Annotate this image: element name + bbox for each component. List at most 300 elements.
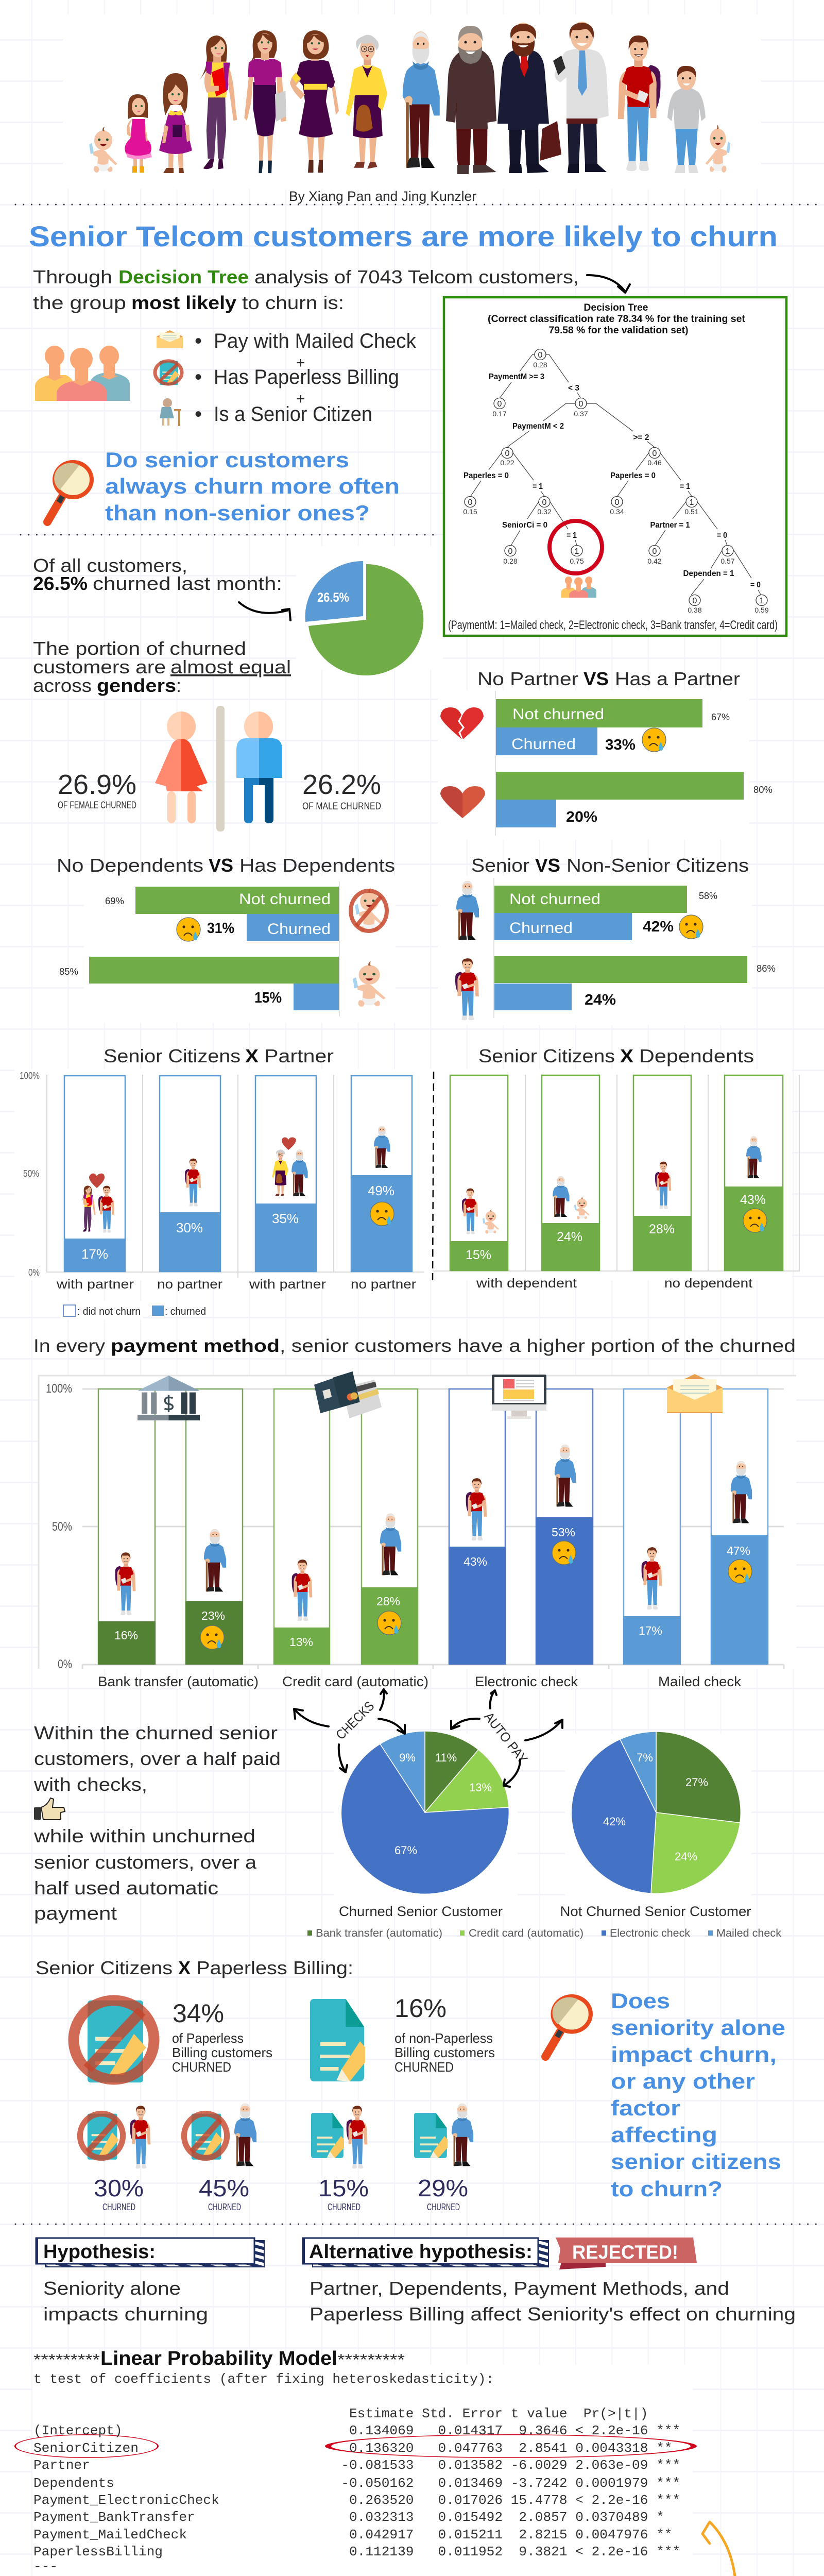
hypothesis block: Seniority alone <box>43 2278 181 2299</box>
panel: decision tree: 0 <box>693 597 697 605</box>
stat: non-paperless churn <box>310 1994 495 2081</box>
regression table: linear probability model: Payment_BankTransfer <box>33 2510 195 2525</box>
icon: sad emoji <box>679 915 703 939</box>
chart: seniors x dependents stacked bars: 24% <box>557 1230 582 1244</box>
panel: decision tree: 0 <box>538 351 543 360</box>
heading: seniors x paperless billing: Paperless Billing: <box>196 1957 353 1978</box>
icon: sad emoji <box>642 728 666 752</box>
stat: senior non-paperless 29%: CHURNED <box>427 2202 460 2212</box>
pie legend: Credit card (automatic) <box>469 1927 583 1939</box>
question: seniority alone: affecting <box>611 2123 717 2147</box>
icon: young man <box>455 958 479 1020</box>
divider <box>216 706 225 832</box>
stat: female churn: OF FEMALE CHURNED <box>58 800 136 811</box>
baby on the right <box>706 125 730 173</box>
question: seniority alone: impact churn, <box>611 2042 777 2066</box>
stat: senior paperless 45%: 45% <box>199 2175 249 2201</box>
chart: senior vs non senior: 86% <box>757 963 776 974</box>
most likely group list: + <box>296 354 305 371</box>
icon: female figure <box>155 711 208 823</box>
panel: decision tree: 0 <box>653 547 657 556</box>
panel: decision tree: 0 <box>508 547 513 556</box>
chart: payment method stacked bars: 23% <box>201 1609 225 1622</box>
panel: decision tree <box>444 297 786 636</box>
stat: male churn: 26.2% <box>302 769 381 800</box>
heading: Has Dependents <box>239 855 395 876</box>
icon: baby <box>353 961 386 1007</box>
chart: dependents: 69% <box>105 896 124 906</box>
panel: decision tree: PaymentM < 2 <box>512 422 564 431</box>
chart: seniors x partner stacked bars: 0% <box>28 1267 40 1278</box>
item: paperless billing: • <box>195 366 202 388</box>
icon: pointing hand <box>34 1798 65 1820</box>
heading <box>477 668 740 689</box>
stat: paperless churn: 34% <box>173 1999 224 2028</box>
pie legend: Mailed check <box>716 1927 782 1939</box>
sad emojis <box>200 1541 752 1649</box>
category labels <box>98 1674 742 1689</box>
icon: broken heart <box>440 707 484 739</box>
panel: decision tree: 0.28 <box>503 557 518 565</box>
stat: young paperless 30%: 30% <box>94 2175 144 2201</box>
hand-drawn arrows <box>294 1689 562 1787</box>
chart: payment method stacked bars: 100% <box>46 1382 72 1396</box>
regression table: linear probability model: 0.032313 0.015492 2.0857 0.0370489 * <box>341 2510 664 2525</box>
regression table: linear probability model: (Intercept) <box>33 2423 123 2438</box>
figures: customers in bars <box>115 1445 752 1621</box>
chart: dependents: 85% <box>59 967 78 977</box>
panel: decision tree: Partner = 1 <box>650 521 690 530</box>
item: mailed check: • <box>195 330 202 352</box>
hypothesis block: impacts churning <box>43 2303 208 2325</box>
heading: seniors x paperless billing: X <box>178 1957 191 1978</box>
panel: decision tree: 0.32 <box>537 507 552 516</box>
panel: decision tree: < 3 <box>568 384 579 393</box>
question: seniority alone: Does <box>611 1989 670 2013</box>
axis labels <box>56 1277 416 1292</box>
category labels: Credit card (automatic) <box>282 1674 428 1689</box>
chart: seniors x dependents stacked bars: with dependent <box>476 1276 577 1291</box>
chart: no partner vs partner: 33% <box>605 737 636 753</box>
legend: : churned <box>165 1306 206 1317</box>
heading: Non-Senior Citizens <box>566 855 749 876</box>
panel: decision tree: Dependen = 1 <box>683 569 734 578</box>
panel: decision tree: = 1 <box>680 482 690 491</box>
pie chart: not churned senior customer: 24% <box>675 1850 697 1863</box>
heading: seniors x paperless billing: Senior Citizens <box>36 1957 173 1978</box>
pie chart: not churned senior customer: Not Churned Senior Customer <box>560 1904 751 1919</box>
regression table: linear probability model: PaperlessBilling <box>33 2544 163 2560</box>
panel: decision tree: 1 <box>760 597 764 605</box>
icon: young man <box>655 1162 671 1209</box>
regression table: linear probability model: Estimate Std. Error t value Pr(>|t|) <box>341 2406 648 2421</box>
icon: paperless document <box>155 361 182 385</box>
text: payment insight: with checks, <box>33 1774 147 1795</box>
hypothesis block: Hypothesis: <box>43 2241 156 2263</box>
stat: paperless churn: Billing customers <box>172 2045 272 2060</box>
hand-drawn annotation: checks: CHECKS <box>333 1698 377 1742</box>
panel: decision tree: 1 <box>690 498 694 507</box>
text: payment insight: while within unchurned <box>33 1825 255 1846</box>
regression table: linear probability model <box>14 2371 697 2576</box>
heading: Senior <box>471 855 529 876</box>
category labels: Mailed check <box>658 1674 742 1689</box>
icon: small group of people <box>561 577 596 598</box>
stat: non-paperless churn: Billing customers <box>394 2045 495 2060</box>
most likely group list: Is a Senior Citizen <box>214 403 372 426</box>
stat: non-paperless churn: 16% <box>394 1994 447 2023</box>
regression table: linear probability model: Payment_ElectronicCheck <box>33 2493 219 2508</box>
red highlight circle <box>550 521 602 573</box>
chart: dependents <box>57 855 395 1016</box>
panel: decision tree: 0.37 <box>574 410 588 418</box>
woman in purple dress <box>290 30 339 173</box>
chart: payment method stacked bars: 28% <box>376 1595 400 1608</box>
regression table: linear probability model: --- <box>33 2559 58 2574</box>
heading <box>471 855 749 876</box>
heading: linear probability model: ********* <box>33 2351 100 2368</box>
text: gender: customers are <box>33 656 166 677</box>
regression table: linear probability model: -0.081533 0.013582 -6.0029 2.063e-09 *** <box>341 2458 680 2473</box>
title: Senior Telcom customers are more likely to churn <box>29 220 778 252</box>
icon: magnifying glass <box>545 1996 591 2057</box>
chart: seniors x partner stacked bars: 17% <box>81 1246 108 1262</box>
boy in grey hoodie <box>667 66 706 173</box>
panel: decision tree: Paperles = 0 <box>610 471 656 480</box>
man in dark suit with briefcase <box>497 23 561 173</box>
text: gender: almost equal <box>170 656 291 677</box>
chart: seniors x dependents stacked bars: 28% <box>649 1222 675 1236</box>
panel: decision tree: 0.42 <box>647 557 662 565</box>
chart: seniors x dependents stacked bars: no dependent <box>664 1276 752 1291</box>
chart: seniors x partner stacked bars <box>20 1071 424 1317</box>
heading: seniors x dependents: Dependents <box>639 1045 754 1066</box>
panel: decision tree: 0.38 <box>688 606 702 614</box>
chart: no partner vs partner: 80% <box>753 785 772 795</box>
grandfather with cane <box>403 31 440 168</box>
chart: payment method stacked bars: 43% <box>464 1555 487 1568</box>
stat: senior non-paperless 29%: 29% <box>418 2175 468 2201</box>
text: gender: The portion of churned <box>33 638 246 659</box>
text: gender: : <box>176 675 181 696</box>
text: share churned: 26.5% <box>33 573 88 594</box>
icon: magnifying glass <box>47 462 92 522</box>
rejected ribbon <box>556 2238 697 2269</box>
question: do seniors always churn more: Do senior customers <box>105 448 349 472</box>
text: gender <box>33 638 291 696</box>
axis labels: no partner <box>351 1277 416 1292</box>
axis labels: no partner <box>157 1277 222 1292</box>
pie chart: churned senior customer: 11% <box>435 1751 457 1764</box>
panel: decision tree: SeniorCi = 0 <box>502 521 547 530</box>
text: share churned: Of all customers, <box>33 555 187 576</box>
question: seniority alone: senior citizens <box>611 2149 781 2174</box>
chart: payment method stacked bars: 17% <box>639 1624 662 1637</box>
panel: decision tree: 0.17 <box>492 410 507 418</box>
regression table: linear probability model: 0.136320 0.047763 2.8541 0.0043318 ** <box>341 2441 672 2456</box>
chart: payment method stacked bars: 50% <box>52 1520 72 1534</box>
chart: seniors x dependents stacked bars <box>433 1075 800 1291</box>
item: senior citizen: • <box>195 403 202 426</box>
text: gender: across <box>33 675 92 696</box>
regression table: linear probability model: SeniorCitizen <box>33 2441 139 2456</box>
alternative hypothesis block: Paperless Billing affect Seniority's effect on churning <box>310 2303 796 2325</box>
question: do seniors always churn more: than non-senior ones? <box>105 501 370 525</box>
question: seniority alone: to churn? <box>611 2177 723 2201</box>
pie chart: not churned senior customer: 7% <box>637 1751 653 1764</box>
heading: payment methods <box>33 1336 796 1356</box>
baby with bottle <box>89 127 117 173</box>
heading: seniors x paperless billing <box>36 1957 353 1978</box>
stat: paperless churn: CHURNED <box>172 2059 231 2075</box>
stat: young non-paperless 15%: 15% <box>318 2175 369 2201</box>
grandmother <box>346 35 387 169</box>
panel: decision tree: 1 <box>726 547 730 556</box>
most likely group list: Has Paperless Billing <box>214 366 399 388</box>
intro text: most likely <box>131 292 236 313</box>
heading: payment methods: In every <box>33 1336 106 1356</box>
heading: seniors x dependents: Senior Citizens <box>478 1045 615 1066</box>
pie legend: Bank transfer (automatic) <box>316 1927 442 1939</box>
regression table: linear probability model: Partner <box>33 2458 90 2473</box>
chart: dependents: 15% <box>254 990 282 1006</box>
panel: decision tree: 0.46 <box>647 459 662 467</box>
stat: young paperless 30% <box>80 2106 150 2212</box>
heading: No Dependents <box>57 855 203 876</box>
icon: senior couple <box>272 1138 308 1196</box>
heading: linear probability model <box>33 2348 405 2369</box>
chart: seniors x dependents stacked bars: 15% <box>466 1248 491 1262</box>
heading: Has a Partner <box>615 668 740 689</box>
stat: senior paperless 45% <box>184 2104 256 2212</box>
authors line: By Xiang Pan and Jing Kunzler <box>289 189 476 204</box>
highlight ellipses <box>14 2434 697 2458</box>
woman in magenta top <box>244 30 286 173</box>
most likely group list <box>155 330 417 426</box>
chart: senior vs non senior: Not churned <box>509 891 600 908</box>
heading: seniors x partner: Senior Citizens <box>104 1045 241 1066</box>
pie chart: churned senior customer: Churned Senior Customer <box>339 1904 503 1919</box>
icon: envelope <box>157 330 183 348</box>
panel: decision tree: 0.15 <box>463 507 477 516</box>
stat: non-paperless churn: of non-Paperless <box>394 2030 493 2046</box>
heading: seniors x partner <box>104 1045 334 1066</box>
panel: decision tree: = 1 <box>533 482 543 491</box>
pie legend: Electronic check <box>610 1927 690 1939</box>
icon: senior man <box>374 1126 390 1168</box>
panel: decision tree: 1 <box>575 547 579 556</box>
stat: young non-paperless 15% <box>311 2106 369 2212</box>
chart: payment method stacked bars: 13% <box>289 1635 313 1649</box>
intro text: Through <box>33 266 112 287</box>
panel: decision tree: 0 <box>468 498 473 507</box>
chart: payment method stacked bars <box>39 1371 796 1689</box>
icon: bank <box>138 1376 200 1420</box>
teenage woman <box>199 36 237 170</box>
chart: no partner vs partner <box>440 668 772 836</box>
icon: male figure <box>236 711 282 823</box>
panel: decision tree: (Correct classification rate 78.34 % for the training set <box>488 314 746 325</box>
alternative hypothesis block: Alternative hypothesis: <box>309 2241 533 2263</box>
axis labels: with partner <box>56 1277 134 1292</box>
category labels: Bank transfer (automatic) <box>98 1674 259 1689</box>
chart: payment method stacked bars: 16% <box>114 1629 138 1642</box>
heading: seniors x partner: Partner <box>264 1045 334 1066</box>
pie chart: not churned senior customer: 27% <box>685 1776 708 1789</box>
text: payment insight: payment <box>34 1903 117 1924</box>
chart: seniors x partner stacked bars: 100% <box>20 1071 40 1081</box>
text: share churned: churned last month: <box>93 573 282 594</box>
man in white shirt and blue tie <box>553 22 609 173</box>
icon: group of people <box>35 346 130 401</box>
chart: payment method stacked bars: 0% <box>58 1657 72 1671</box>
pie chart: not churned senior customer: 42% <box>603 1815 626 1828</box>
heading: VS <box>535 855 560 876</box>
panel: decision tree: 0.28 <box>533 361 547 369</box>
header illustration: family of all ages <box>89 22 730 174</box>
axis labels: with partner <box>249 1277 326 1292</box>
icon: envelope <box>667 1374 723 1413</box>
stat: young paperless 30%: CHURNED <box>102 2202 135 2212</box>
chart: no partner vs partner: Churned <box>511 736 576 753</box>
icon: senior man <box>456 881 479 940</box>
girl in purple dress <box>159 73 192 173</box>
icon: young man with baby <box>462 1189 499 1234</box>
chart: senior vs non senior: 42% <box>643 919 674 935</box>
heading: VS <box>209 855 233 876</box>
text: payment insight <box>33 1722 281 1924</box>
panel: decision tree: 0 <box>497 400 502 409</box>
chart: no partner vs partner: 20% <box>566 809 597 825</box>
chart: dependents: 31% <box>207 920 234 937</box>
regression table: linear probability model: 0.042917 0.015211 2.8215 0.0047976 ** <box>341 2527 672 2543</box>
icon: sad emoji <box>743 1209 767 1232</box>
orange arrow up <box>702 2522 736 2576</box>
most likely group list: Pay with Mailed Check <box>214 330 417 352</box>
panel: decision tree: 0.75 <box>570 557 584 565</box>
pie chart: churned senior customer: 9% <box>399 1751 416 1764</box>
small girl in pink dress <box>125 94 152 173</box>
icon: credit card <box>314 1371 382 1418</box>
young man with backpack <box>618 36 661 171</box>
intro text: analysis of 7043 Telcom customers, <box>254 266 579 287</box>
heading: seniors x dependents <box>478 1045 754 1066</box>
panel: decision tree: 0.22 <box>500 459 514 467</box>
text: payment insight: half used automatic <box>34 1877 218 1899</box>
arrow to decision tree <box>587 275 630 293</box>
hypothesis block <box>36 2238 264 2325</box>
chart: seniors x partner stacked bars: 30% <box>176 1220 203 1235</box>
stat: female churn: 26.9% <box>58 769 136 800</box>
icon: sad emoji <box>370 1202 394 1226</box>
panel: decision tree: 0.59 <box>754 606 769 614</box>
chart: no partner vs partner: Not churned <box>512 706 604 723</box>
intro text: to churn is: <box>242 292 344 313</box>
question: do seniors always churn more <box>105 448 400 525</box>
heading: payment methods: payment method <box>111 1336 280 1356</box>
regression table: linear probability model: 0.263520 0.017026 15.4778 < 2.2e-16 *** <box>341 2493 680 2508</box>
pie chart: churned senior customer <box>339 1731 509 1919</box>
pie chart: overall churn <box>305 561 423 675</box>
panel: decision tree: 0 <box>542 498 547 507</box>
icon: senior man <box>746 1136 762 1178</box>
question: seniority alone: or any other <box>611 2069 755 2093</box>
stat: senior paperless 45%: CHURNED <box>208 2202 241 2212</box>
stat: young non-paperless 15%: CHURNED <box>328 2202 360 2212</box>
panel: decision tree: 0 <box>505 449 510 458</box>
chart: seniors x partner stacked bars: 35% <box>272 1211 299 1226</box>
heading: VS <box>583 668 609 689</box>
chart: seniors x dependents stacked bars: 43% <box>740 1193 766 1207</box>
panel: decision tree: >= 2 <box>633 433 649 442</box>
stat: non-paperless churn: CHURNED <box>394 2059 454 2075</box>
heading: seniors x dependents: X <box>620 1045 633 1066</box>
chart: dependents: Churned <box>267 921 331 938</box>
panel: decision tree: 0.57 <box>720 557 735 565</box>
category labels: Electronic check <box>475 1674 578 1689</box>
heading: payment methods: , senior customers have a higher portion of the churned <box>280 1336 796 1356</box>
hand-drawn annotation: auto pay: AUTO PAY <box>481 1709 531 1767</box>
icon: heart <box>440 786 485 818</box>
pie legend <box>307 1927 782 1939</box>
arrow to pie <box>239 602 290 620</box>
question: seniority alone: seniority alone <box>611 2015 785 2040</box>
panel: decision tree: 0.34 <box>610 507 624 516</box>
regression table: linear probability model: -0.050162 0.013469 -3.7242 0.0001979 *** <box>341 2476 680 2491</box>
heading: seniors x partner: X <box>245 1045 259 1066</box>
icon: senior woman <box>160 398 181 426</box>
icon: senior man with baby <box>553 1176 590 1219</box>
icon: crossed-out baby <box>351 888 387 933</box>
stat: male churn: OF MALE CHURNED <box>302 801 381 812</box>
chart: payment method stacked bars: 53% <box>552 1526 575 1539</box>
pie chart: churned senior customer: 67% <box>394 1844 417 1857</box>
stat: paperless churn: of Paperless <box>172 2030 244 2046</box>
panel: decision tree: 0 <box>653 449 657 458</box>
text: payment insight: senior customers, over a <box>34 1852 257 1873</box>
heading: linear probability model: ********* <box>337 2351 405 2368</box>
text: payment insight: Within the churned senior <box>34 1722 278 1743</box>
panel: decision tree: Decision Tree <box>584 302 648 313</box>
question: do seniors always churn more: always churn more often <box>105 474 400 498</box>
question: seniority alone: factor <box>611 2096 680 2120</box>
heading: No Partner <box>477 668 578 689</box>
intro text: the group <box>33 292 126 313</box>
man in brown sweater <box>446 26 496 174</box>
chart: no partner vs partner: 67% <box>711 712 730 722</box>
heading: linear probability model: Linear Probability Model <box>100 2348 337 2369</box>
pie chart: overall churn: 26.5% <box>317 590 349 605</box>
legend: : did not churn <box>77 1306 141 1317</box>
icon: young man <box>185 1159 201 1207</box>
panel: decision tree: PaymentM >= 3 <box>489 372 544 381</box>
rejected ribbon: REJECTED! <box>572 2242 678 2263</box>
text: payment insight: customers, over a half paid <box>34 1748 281 1769</box>
icon: sad emoji <box>177 918 200 941</box>
text: gender: genders <box>97 675 176 696</box>
panel: decision tree: 0 <box>615 498 620 507</box>
panel: decision tree: 79.58 % for the validation set) <box>549 325 688 336</box>
question: seniority alone <box>611 1989 785 2201</box>
pie chart: churned senior customer: 13% <box>469 1781 492 1794</box>
icon: young couple <box>81 1174 114 1233</box>
chart: senior vs non senior <box>455 855 776 1020</box>
chart: seniors x partner stacked bars: 50% <box>23 1168 39 1179</box>
chart: senior vs non senior: 58% <box>699 891 717 901</box>
chart: dependents: Not churned <box>239 891 331 908</box>
pie chart: not churned senior customer <box>560 1732 751 1919</box>
regression table: linear probability model: t test of coefficients (after fixing heteroskedasticity): <box>33 2371 494 2387</box>
